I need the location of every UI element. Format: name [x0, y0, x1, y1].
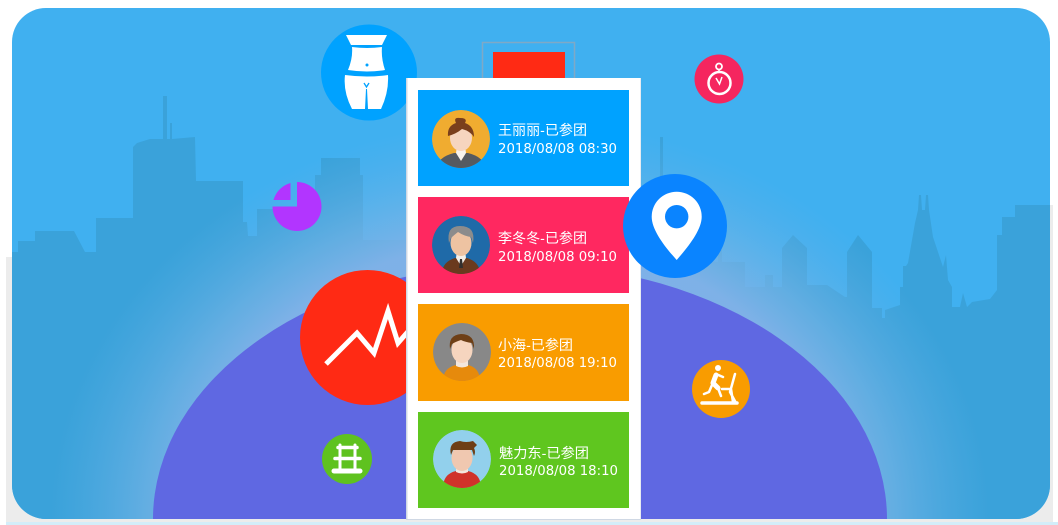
backing strips — [6, 205, 1058, 525]
member 2 time: 2018/08/08 09:10 — [498, 250, 617, 265]
icon: pie chart — [272, 182, 322, 231]
icon: dumbbells — [322, 434, 372, 484]
card: member 1 — [418, 90, 629, 186]
card: member 2 — [418, 197, 629, 293]
red tab behind card panel — [482, 42, 574, 79]
card: member 4 — [418, 412, 629, 508]
city skyline silhouette — [12, 96, 1050, 519]
card: member 3 — [418, 304, 629, 401]
central glow — [76, 158, 964, 519]
purple dome — [153, 264, 887, 519]
member 4 name: 魅力东-已参团 — [499, 445, 589, 461]
icon: location pin — [623, 174, 727, 278]
icon: red trend circle — [300, 270, 435, 405]
icon: stopwatch — [694, 54, 744, 104]
member 1 name: 王丽丽-已参团 — [498, 122, 587, 138]
member 2 name: 李冬冬-已参团 — [498, 230, 587, 246]
icon: treadmill — [692, 360, 750, 418]
member 4 time: 2018/08/08 18:10 — [499, 464, 618, 479]
member 3 name: 小海-已参团 — [498, 337, 573, 353]
member 1 time: 2018/08/08 08:30 — [498, 142, 617, 157]
icon: waist — [321, 24, 417, 120]
avatar: man in orange — [433, 323, 491, 381]
avatar: grey-haired man — [432, 216, 490, 274]
avatar: woman in suit — [432, 110, 490, 168]
member 3 time: 2018/08/08 19:10 — [498, 356, 617, 371]
avatar: man in red — [433, 430, 491, 488]
panel: member list card — [406, 78, 641, 520]
